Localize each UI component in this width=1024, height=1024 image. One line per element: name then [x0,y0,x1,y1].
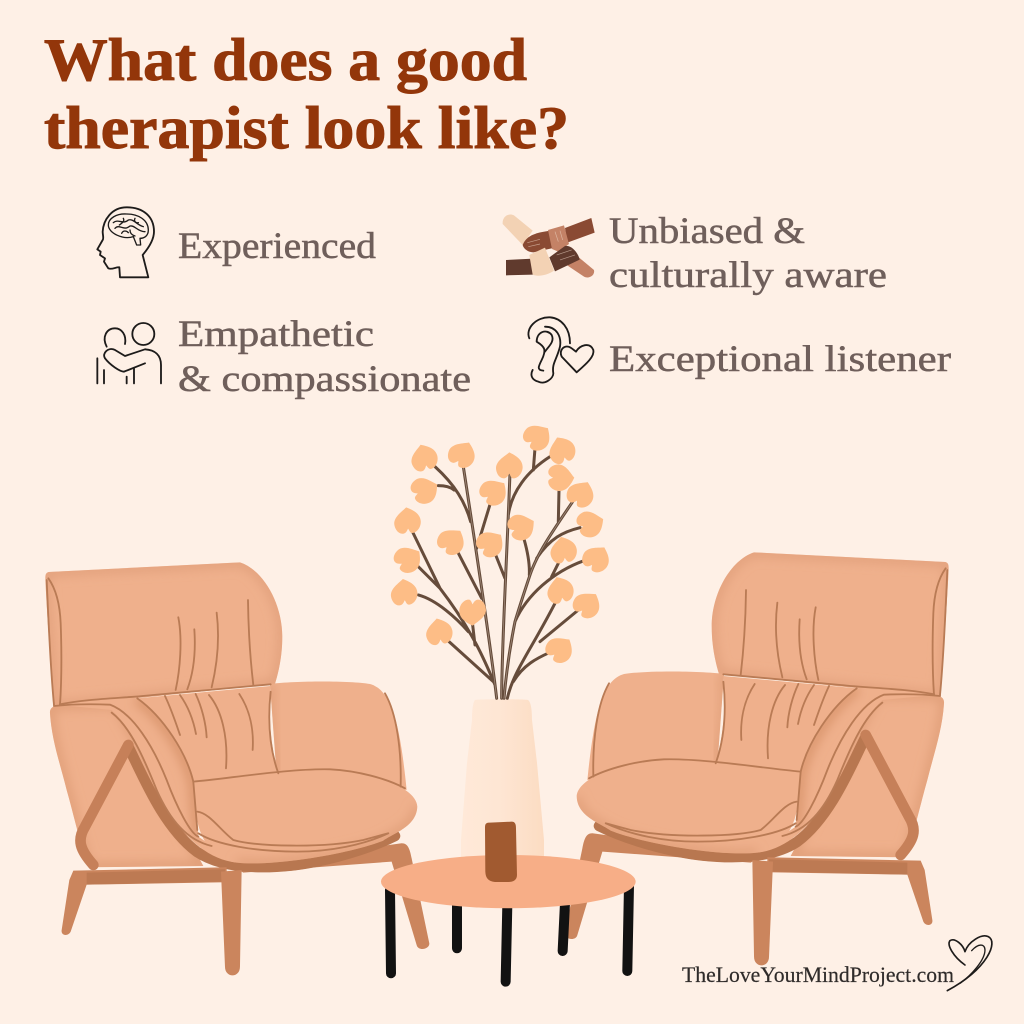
website credit: TheLoveYourMindProject.com [682,962,954,987]
cup [485,822,517,882]
icon: handwritten heart logo [947,936,992,991]
text: Empathetic & compassionate: Empathetic [178,314,374,355]
text: Experienced: Experienced [178,226,377,267]
text: Unbiased & culturally aware [609,211,887,296]
title: What does a good [44,27,527,93]
text: Exceptional listener: Exceptional listener [609,339,951,380]
title [44,27,569,161]
title: therapist look like? [44,95,569,161]
coffee table [381,822,636,982]
branches with leaves [390,418,615,698]
table top [381,855,636,908]
left armchair [45,562,429,975]
icon: head with brain [97,207,154,277]
branches [412,448,584,698]
text: Unbiased & culturally aware: Unbiased & [609,211,805,252]
icon: two people hugging [97,323,161,383]
icon: ear and heart [528,317,594,383]
table legs [390,887,629,982]
leaves [390,418,615,667]
text: Empathetic & compassionate: & compassionate [178,359,471,400]
text: Unbiased & culturally aware: culturally aware [609,255,887,296]
icon: linked hands [503,215,595,278]
right armchair [565,552,949,965]
text: Empathetic & compassionate [178,314,471,400]
vase [461,699,544,870]
